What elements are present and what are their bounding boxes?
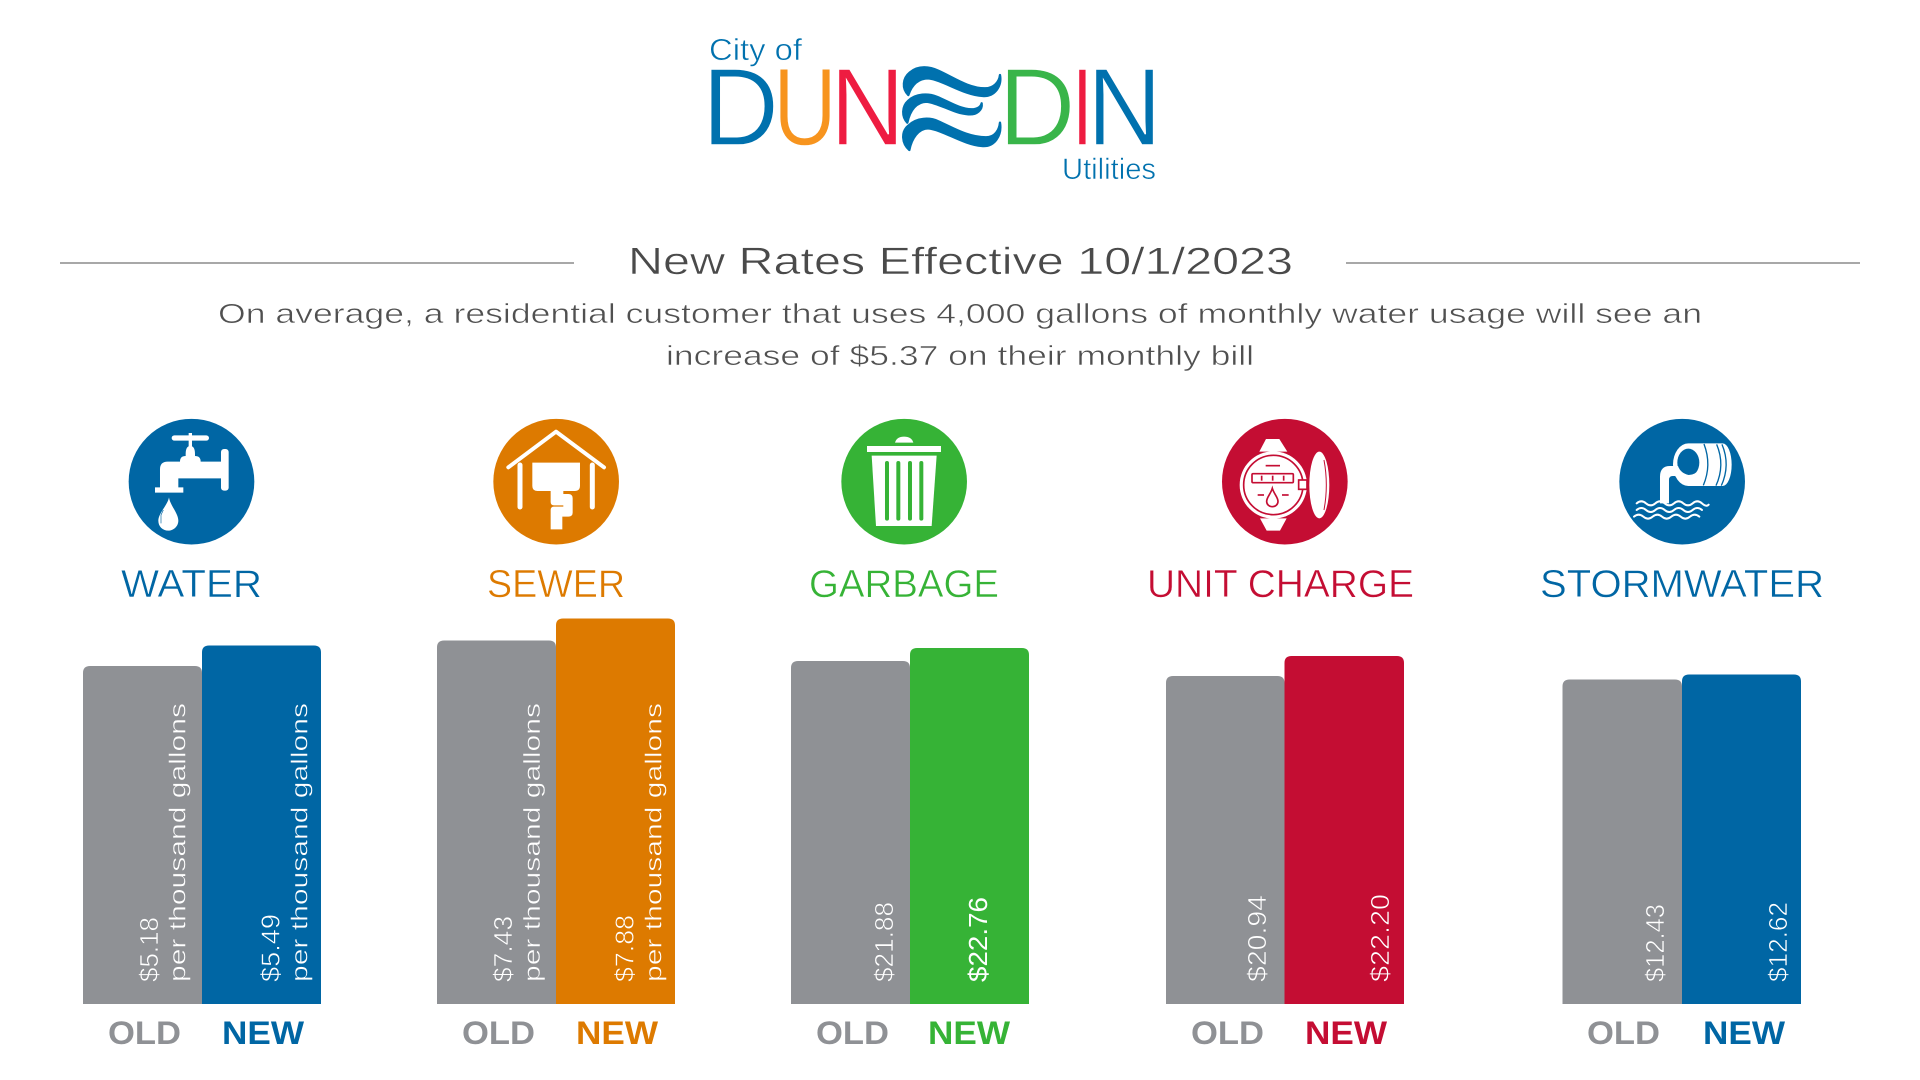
icon: outfall pipe: [1619, 419, 1745, 544]
intro text: [218, 298, 1702, 371]
logo: wordmark right letters: D: [998, 46, 1076, 169]
value: water new: $5.49: [256, 914, 286, 982]
chart: garbage new bar: [910, 648, 1029, 1004]
axis: new: NEW: [1703, 1015, 1786, 1051]
value: garbage new: $22.76: [963, 897, 993, 982]
axis: old: OLD: [816, 1015, 889, 1051]
panel: unit charge: [1147, 419, 1414, 1051]
value: sewer old: $7.43: [488, 916, 518, 982]
axis: new: NEW: [576, 1015, 659, 1051]
panel: garbage: [791, 419, 1029, 1051]
label: garbage: GARBAGE: [809, 563, 999, 606]
icon: water meter: [1222, 419, 1348, 544]
chart: unit new bar: [1284, 656, 1404, 1004]
axis: old: OLD: [1191, 1015, 1264, 1051]
unit: water old: per thousand gallons: [164, 703, 190, 982]
icon: trash can: [841, 419, 967, 544]
chart: stormwater new bar: [1682, 674, 1801, 1004]
panel: stormwater: [1540, 419, 1824, 1051]
chart: sewer old bar: [437, 640, 556, 1004]
panel: water: [83, 419, 321, 1051]
value: unit new: $22.20: [1365, 894, 1395, 982]
unit: sewer old: per thousand gallons: [519, 703, 545, 982]
intro text: On average, a residential customer that uses 4,000 gallons of monthly water usage will see an: [218, 298, 1702, 329]
logo: wordmark right letters: [998, 46, 1162, 169]
intro text: increase of $5.37 on their monthly bill: [666, 340, 1254, 371]
unit: sewer new: per thousand gallons: [640, 703, 666, 982]
logo: wordmark left letters: [702, 46, 905, 169]
value: stormwater old: $12.43: [1640, 904, 1670, 982]
chart: water old bar: [83, 666, 202, 1004]
logo: City of Dunedin Utilities: [702, 32, 1162, 186]
icon: water faucet: [129, 419, 254, 544]
axis: old: OLD: [1587, 1015, 1660, 1051]
icon: sewer pipe in house: [493, 419, 619, 544]
value: sewer new: $7.88: [610, 915, 640, 982]
value: garbage old: $21.88: [869, 902, 899, 982]
axis: new: NEW: [928, 1015, 1011, 1051]
logo: wordmark left letters: U: [773, 46, 837, 169]
logo: wordmark right letters: I: [1071, 46, 1093, 169]
logo: wordmark left letters: D: [702, 46, 779, 169]
logo: Utilities: Utilities: [1062, 153, 1156, 186]
axis: new: NEW: [1305, 1015, 1388, 1051]
value: water old: $5.18: [134, 917, 164, 982]
panel: sewer: [437, 419, 675, 1051]
logo: wave E: [903, 67, 1000, 150]
chart: water new bar: [202, 646, 321, 1004]
chart: unit old bar: [1166, 676, 1284, 1004]
axis: old: OLD: [462, 1015, 535, 1051]
label: sewer: SEWER: [487, 563, 625, 606]
label: stormwater: STORMWATER: [1540, 563, 1824, 606]
chart: stormwater old bar: [1562, 680, 1682, 1004]
logo: wordmark left letters: N: [830, 46, 905, 169]
axis: new: NEW: [222, 1015, 305, 1051]
logo: City of: City of: [709, 32, 802, 67]
logo: wordmark right letters: N: [1087, 46, 1162, 169]
chart: sewer new bar: [556, 618, 675, 1004]
value: unit old: $20.94: [1242, 895, 1272, 982]
label: unit charge: UNIT CHARGE: [1147, 563, 1414, 606]
unit: water new: per thousand gallons: [286, 703, 312, 982]
chart: garbage old bar: [791, 661, 910, 1004]
heading: New Rates Effective 10/1/2023: [628, 241, 1293, 283]
label: water: WATER: [121, 563, 262, 606]
value: stormwater new: $12.62: [1763, 902, 1793, 982]
axis: old: OLD: [108, 1015, 181, 1051]
